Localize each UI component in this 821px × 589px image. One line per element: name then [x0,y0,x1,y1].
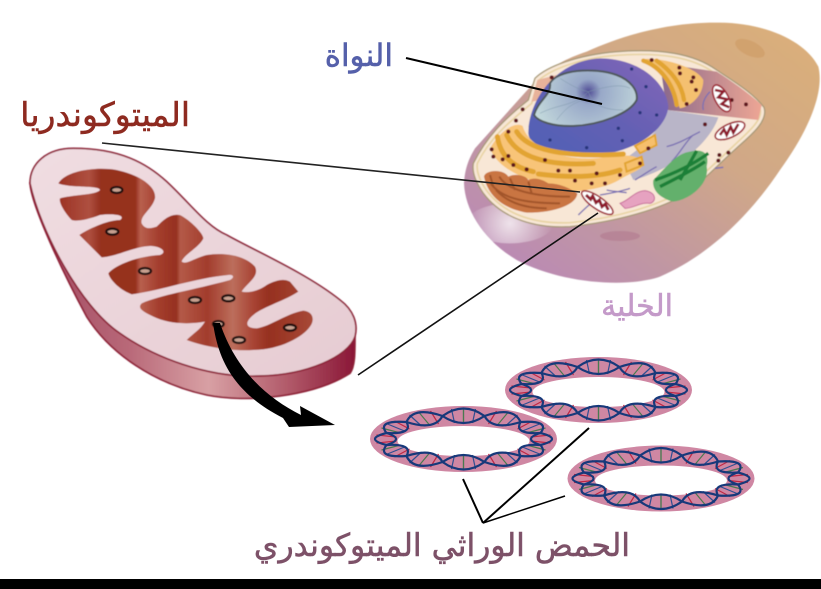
bottom bar [0,579,821,589]
golgi apparatus [484,171,577,213]
cell cutaway [473,51,765,227]
mitochondrion upper [709,82,734,114]
rough ER upper [642,59,703,108]
cristae [58,169,313,350]
mitochondrion in cell [579,187,616,218]
ribosome dots [490,58,748,185]
top face [30,148,356,376]
leader lines: mitochondrial DNA [463,428,589,523]
outer wall [30,183,355,398]
nucleus envelope [528,58,668,155]
illustration: mitochondrion [30,148,356,398]
DNA ring 3 [568,446,754,512]
DNA ring 1 [505,357,692,423]
nucleoplasm [534,70,637,126]
label: nucleus: النواة [325,38,393,74]
cell body [464,23,820,283]
arrow: mitochondrion to DNA [213,323,335,427]
leader line: mitochondria [102,143,580,192]
cytoplasm cut faces [660,63,762,120]
mitochondrion right [713,118,747,143]
leader line: cell to mitochondrion [358,213,598,375]
pink organelle [620,191,655,208]
chloroplast [653,151,708,202]
label: cell: الخلية [601,289,673,324]
rough ER lower [490,125,643,192]
DNA ring 2 [370,406,557,472]
filaments [578,92,723,215]
label: mitochondrial DNA: الحمض الوراثي الميتوكوندري [254,528,630,564]
leader line: nucleus [406,58,602,104]
label: mitochondria: الميتوكوندريا [20,95,190,134]
illustration: animal cell [464,23,820,283]
pores [106,187,296,343]
